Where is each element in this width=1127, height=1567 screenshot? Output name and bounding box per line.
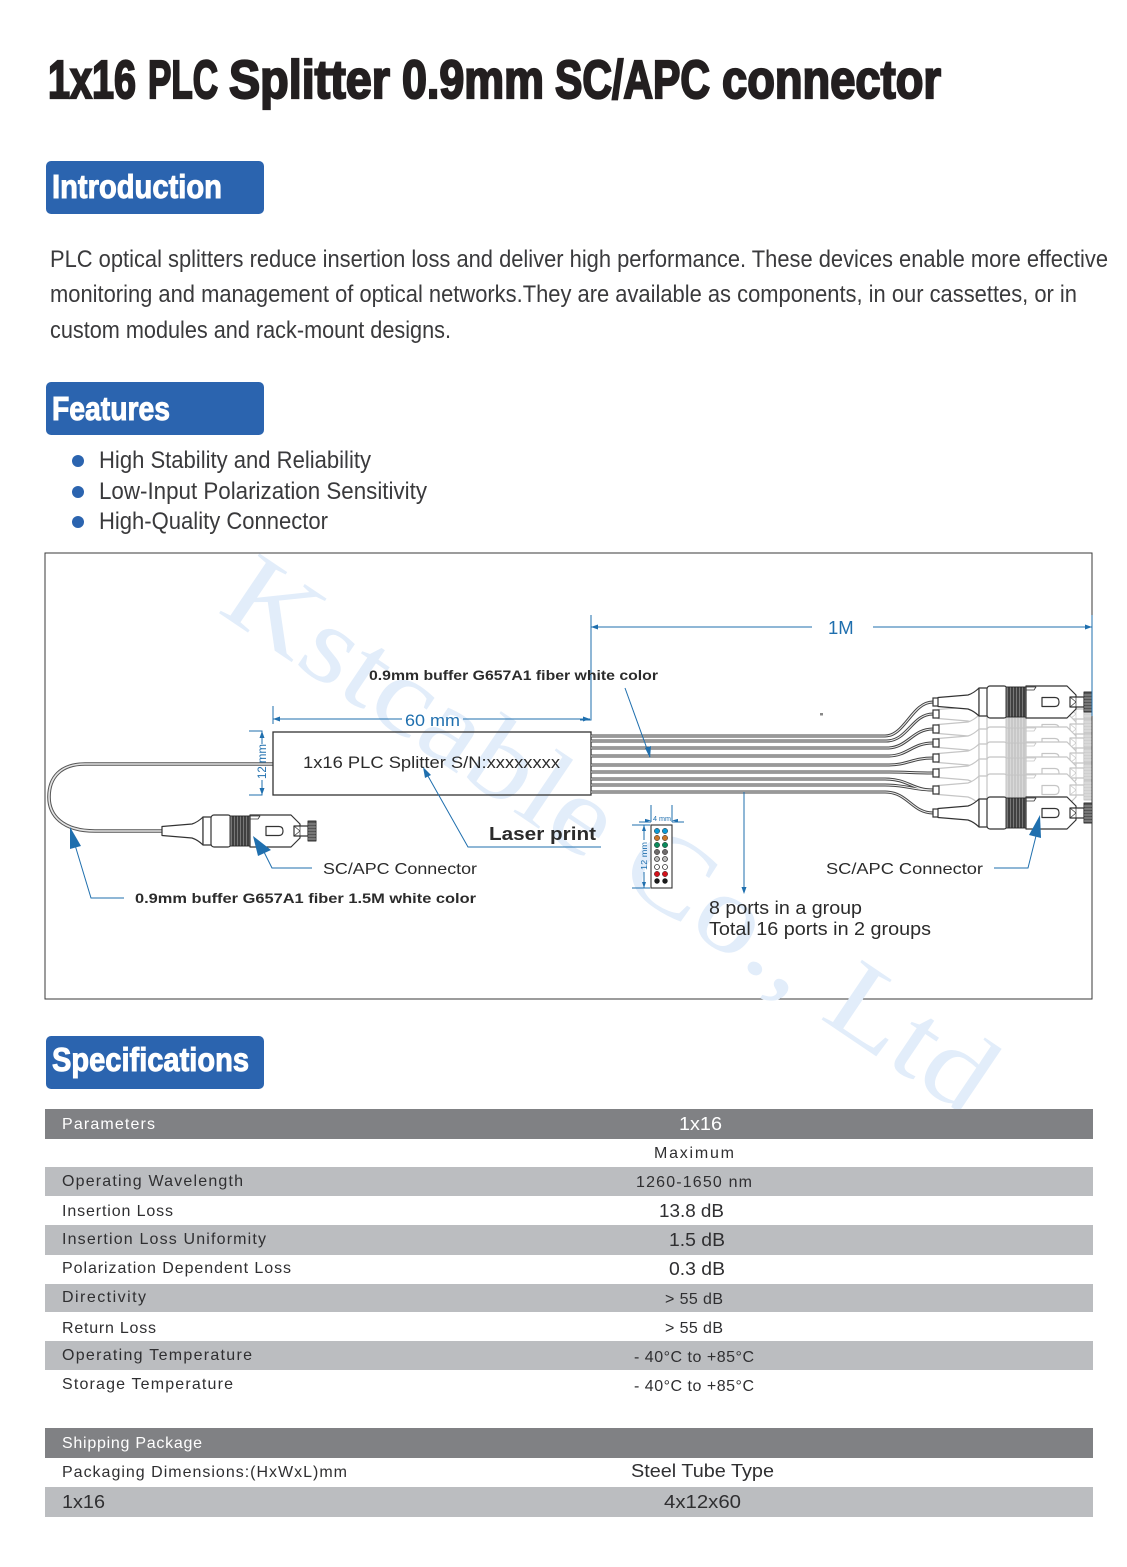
heading: Specifications	[46, 1036, 264, 1089]
output fiber highlights	[591, 702, 933, 813]
panel: product diagram	[45, 530, 1092, 1137]
heading: Introduction	[46, 161, 264, 214]
title	[48, 50, 941, 110]
heading: Specifications: Specifications	[52, 1041, 249, 1078]
features list	[72, 447, 427, 535]
specifications table: > 55 dB	[665, 1320, 723, 1337]
specifications table: > 55 dB	[665, 1291, 723, 1308]
callout: output fiber	[369, 667, 659, 758]
specifications table: 1x16	[679, 1114, 722, 1134]
callout: port groups: 8 ports in a group	[709, 898, 862, 918]
output fibers	[591, 702, 933, 813]
dimension: 1M: 1M	[828, 617, 854, 638]
specifications table: Storage Temperature	[62, 1376, 233, 1393]
title: PLC	[148, 50, 218, 110]
specifications table: Insertion Loss Uniformity	[62, 1231, 266, 1248]
callout: input fiber	[70, 827, 477, 906]
title: SC/APC	[555, 50, 710, 110]
title: connector	[722, 50, 941, 110]
specifications table	[45, 1109, 1093, 1395]
dimension: 12 mm	[249, 731, 269, 795]
callout: output connector	[826, 815, 1041, 878]
fiber loop to input connector	[49, 764, 273, 831]
specifications table: - 40°C to +85°C	[634, 1378, 754, 1395]
introduction text: custom modules and rack-mount designs.	[50, 317, 451, 344]
fiber ribbon cross-section: 12 mm	[640, 842, 649, 870]
splitter box	[273, 732, 591, 795]
faded middle connectors	[938, 698, 1092, 806]
specifications table: Operating Temperature	[62, 1347, 252, 1364]
fiber ribbon cross-section: 4 mm	[653, 816, 671, 823]
specifications table: Maximum	[654, 1145, 734, 1162]
features list: High-Quality Connector	[99, 508, 328, 535]
introduction text	[50, 246, 1108, 344]
heading: Features: Features	[52, 390, 170, 427]
features list: High Stability and Reliability	[99, 447, 371, 474]
callout: port groups: Total 16 ports in 2 groups	[709, 919, 931, 939]
callout: input connector	[253, 836, 478, 878]
specifications table: Return Loss	[62, 1320, 156, 1337]
callout: laser print: Laser print	[489, 823, 596, 844]
specifications table: 0.3 dB	[669, 1259, 725, 1279]
specifications table: Operating Wavelength	[62, 1173, 243, 1190]
ferrule ends of fibers	[933, 698, 939, 817]
specifications table: - 40°C to +85°C	[634, 1349, 754, 1366]
title: Splitter	[229, 50, 390, 110]
callout: laser print	[423, 767, 601, 847]
dimension: 60 mm: 60 mm	[405, 712, 460, 730]
title: 0.9mm	[402, 50, 544, 110]
fiber ribbon cross-section	[632, 805, 684, 888]
specifications table: Insertion Loss	[62, 1203, 173, 1220]
callout: input connector: SC/APC Connector	[323, 861, 478, 878]
shipping package table: Shipping Package	[62, 1435, 202, 1452]
dimension: 12 mm: 12 mm	[255, 744, 269, 779]
shipping package table	[45, 1428, 1093, 1517]
heading: Features	[46, 382, 264, 435]
callout: output connector: SC/APC Connector	[826, 861, 984, 878]
bottom output connector	[938, 797, 1092, 829]
title: 1x16	[48, 50, 136, 110]
shipping package table: 4x12x60	[664, 1492, 741, 1512]
tiny mark	[820, 713, 823, 716]
callout: port groups	[709, 792, 931, 939]
specifications table: 13.8 dB	[659, 1201, 724, 1221]
specifications table: Directivity	[62, 1289, 146, 1306]
callout: input fiber: 0.9mm buffer G657A1 fiber 1.5M white color	[135, 890, 477, 906]
dimension: 1M	[580, 615, 1092, 720]
heading: Introduction: Introduction	[52, 168, 222, 205]
features list: Low-Input Polarization Sensitivity	[99, 478, 427, 505]
shipping package table: Steel Tube Type	[631, 1461, 774, 1481]
splitter box: 1x16 PLC Splitter S/N:xxxxxxxx	[303, 754, 561, 772]
specifications table: Parameters	[62, 1116, 155, 1133]
specifications table: 1.5 dB	[669, 1230, 725, 1250]
shipping package table: 1x16	[62, 1492, 105, 1512]
top output connector	[938, 686, 1092, 718]
input SC/APC connector	[162, 815, 316, 847]
specifications table: Polarization Dependent Loss	[62, 1260, 291, 1277]
watermark: Kstcable Co., Ltd	[203, 530, 1021, 1137]
shipping package table: Packaging Dimensions:(HxWxL)mm	[62, 1464, 347, 1481]
dimension: 60 mm	[273, 706, 590, 730]
specifications table: 1260-1650 nm	[636, 1174, 752, 1191]
callout: output fiber: 0.9mm buffer G657A1 fiber white color	[369, 667, 659, 683]
